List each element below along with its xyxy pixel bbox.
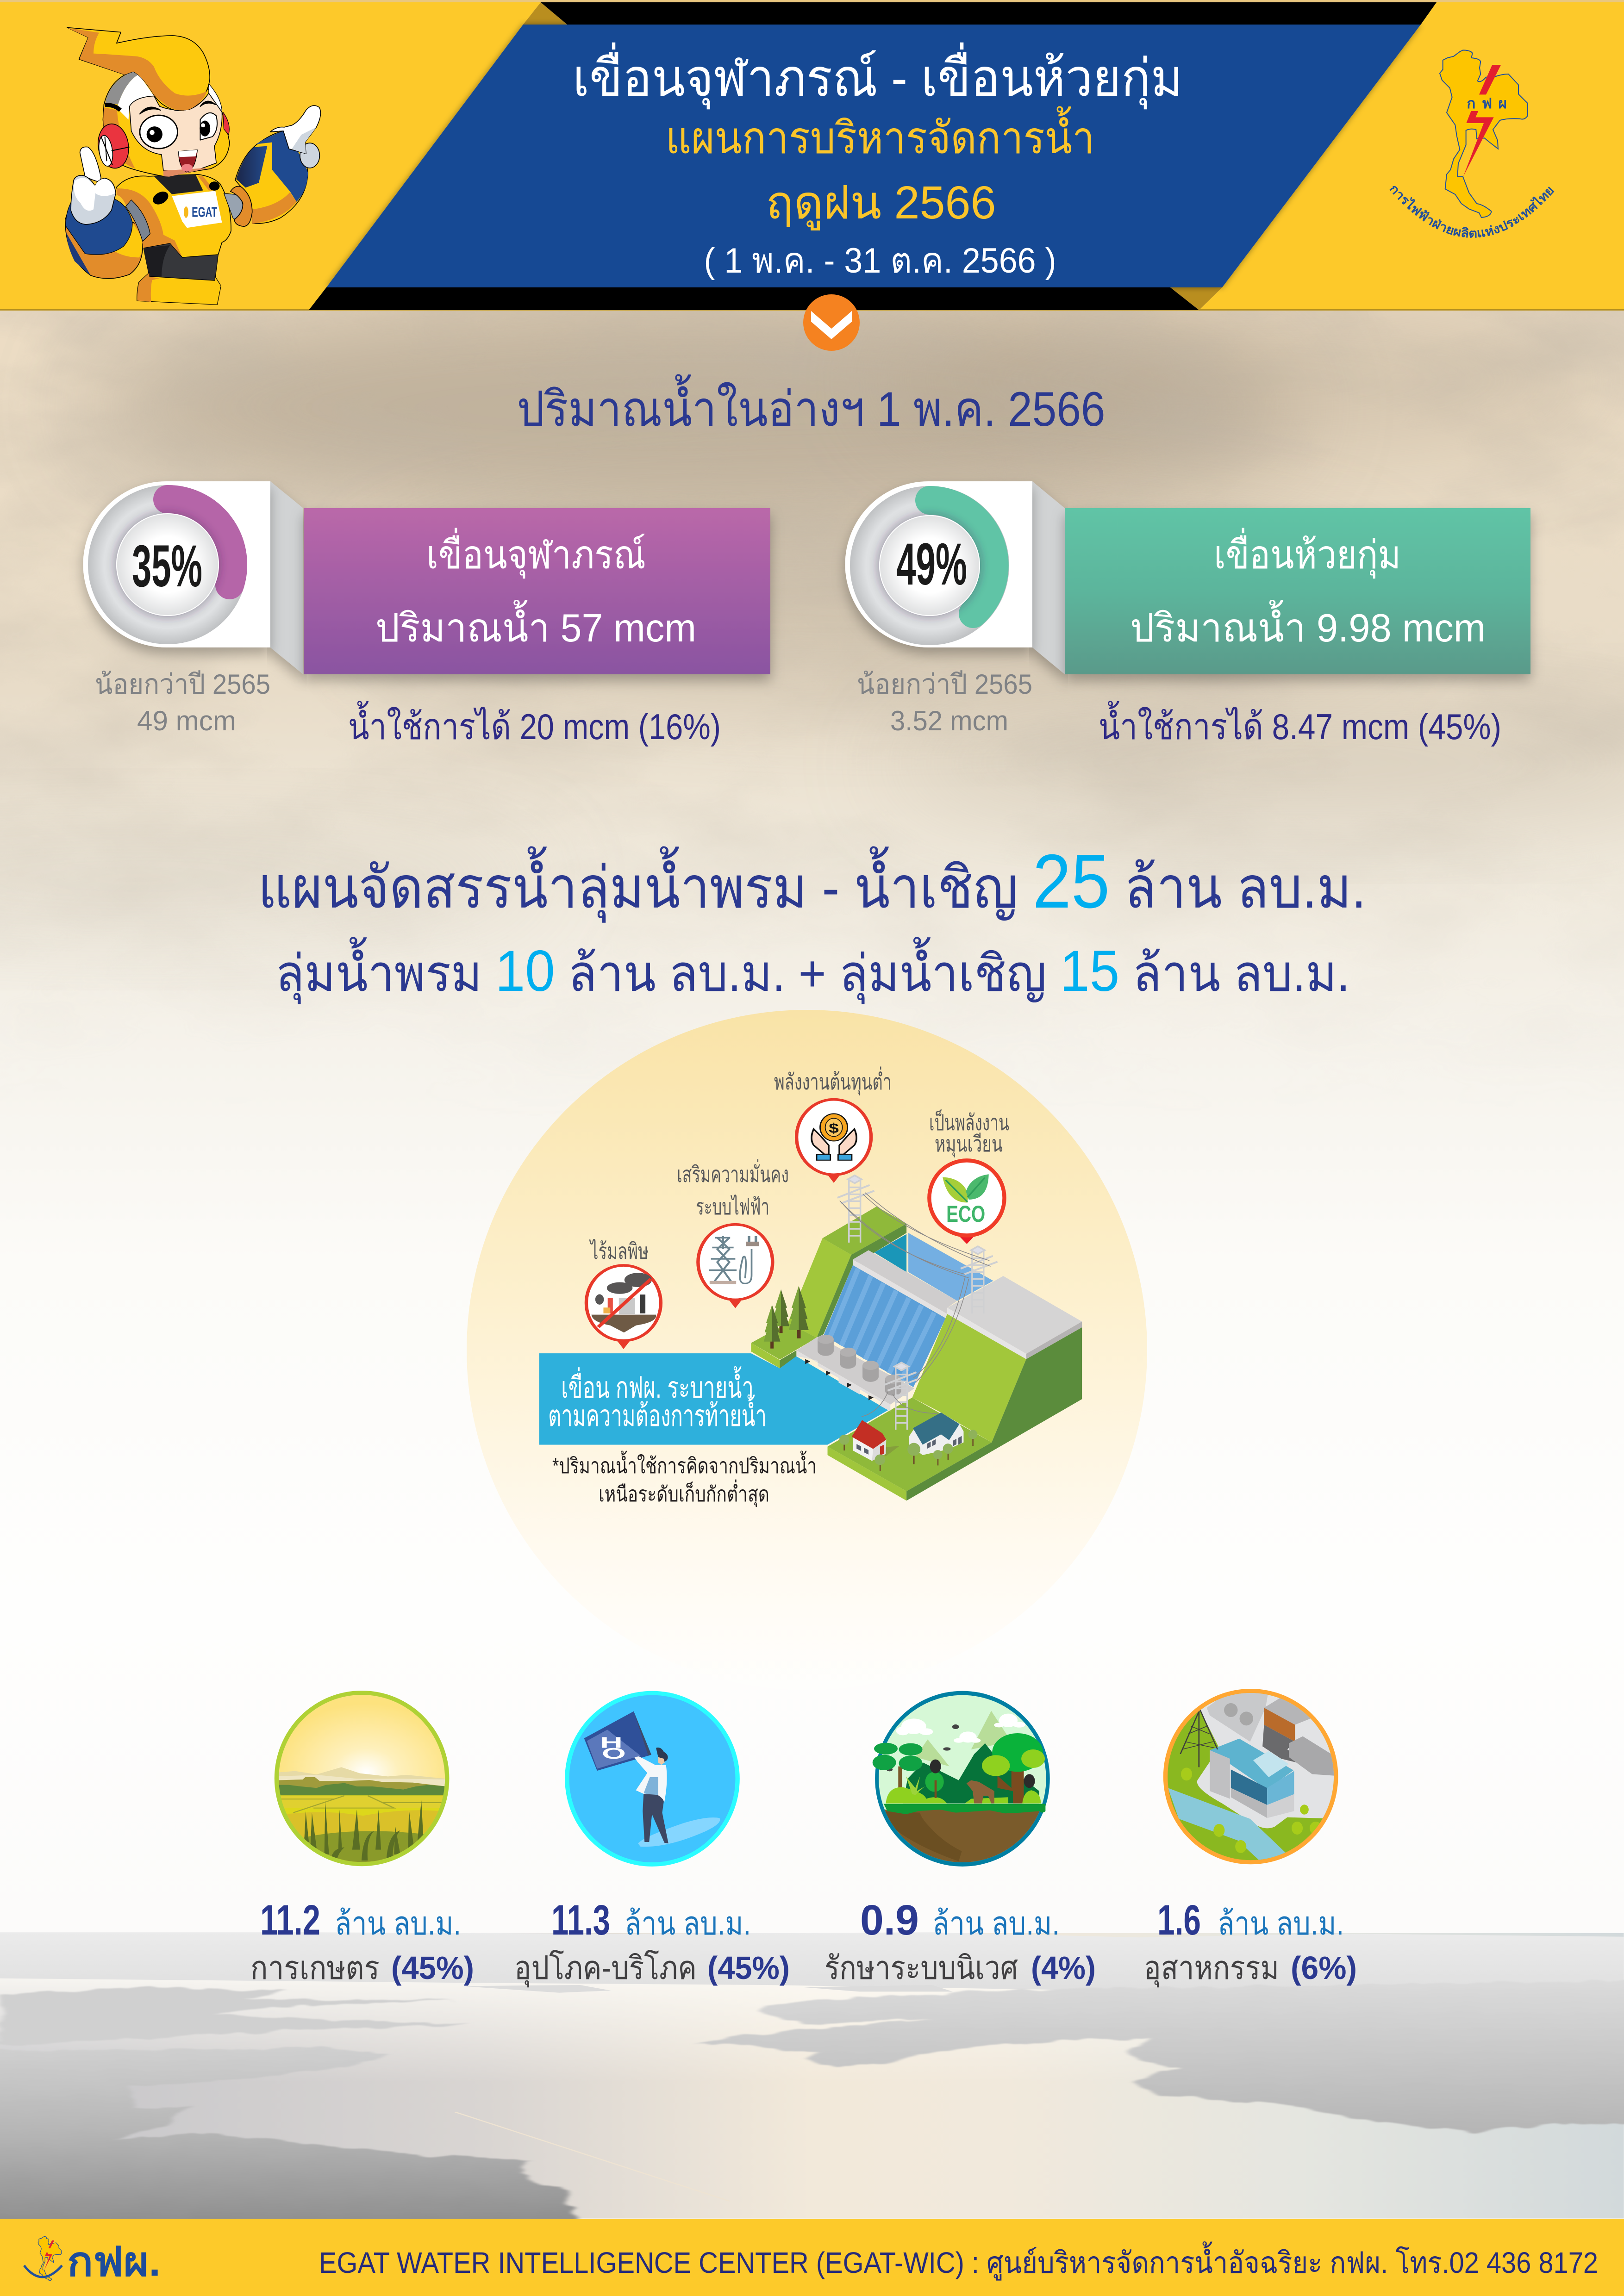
label: renewable energy: หมุนเวียน [935, 1132, 1003, 1157]
lake photo background [0, 1932, 1624, 2224]
sun disc behind dam [467, 1010, 1147, 1690]
label: industry share: (6%) [1291, 1950, 1357, 1986]
EGAT Thailand map logo [1387, 50, 1557, 240]
subtitle: date range: ( 1 พ.ค. - 31 ต.ค. 2566 ) [704, 241, 1056, 280]
pin: low cost energy: $ [829, 1121, 839, 1136]
spillway [824, 1265, 946, 1387]
icon: consumption: H [600, 1734, 623, 1751]
icons: ecosystem and industry [873, 1689, 1338, 1867]
label: ecosystem share: รักษาระบบนิเวศ [824, 1950, 1018, 1986]
EGAT Thailand map logo: กฟผ [1467, 95, 1507, 112]
label: ecosystem share: (4%) [1031, 1950, 1096, 1986]
subheading: basin split: ลุ่มน้ำพรม 10 ล้าน ลบ.ม. + ลุ่มน้ำเชิญ 15 ล้าน ลบ.ม. [275, 937, 1350, 1004]
gauge: 35 percent: 35% [132, 533, 202, 599]
pin: renewable energy: ECO [946, 1201, 985, 1227]
card: purple label [83, 481, 770, 674]
pin: renewable energy [929, 1160, 1005, 1244]
stat: agriculture amount: ล้าน ลบ.ม. [335, 1905, 461, 1941]
icon: industry [1163, 1689, 1338, 1865]
label: grid security: เสริมความมั่นคง [677, 1159, 789, 1187]
icon: chevron down [803, 294, 860, 351]
icons: agriculture and consumption [275, 1691, 740, 1867]
left hill [788, 1207, 906, 1338]
subtitle: plan: แผนการบริหารจัดการน้ำ [666, 106, 1094, 163]
illustration pins [586, 1100, 871, 1349]
stat: consumption amount [551, 1897, 751, 1944]
banner text [548, 1366, 767, 1432]
label: agriculture share [250, 1950, 474, 1986]
usable water: น้ำใช้การได้ 20 mcm (16%) [348, 701, 721, 747]
panel: Huai Kum dam [845, 481, 1530, 747]
dam crest [853, 1250, 957, 1319]
note: less than 2565: น้อยกว่าปี 2565 [95, 669, 270, 700]
label: no pollution: ไร้มลพิษ [589, 1238, 649, 1264]
note: 3.52 mcm: 3.52 mcm [890, 705, 1008, 736]
icon: consumption [565, 1691, 740, 1867]
pin: grid security [698, 1225, 773, 1308]
stat: industry amount: ล้าน ลบ.ม. [1218, 1905, 1344, 1941]
note: 49 mcm: 49 mcm [137, 705, 236, 736]
label: industry share: อุสาหกรรม [1144, 1950, 1279, 1988]
footnote: เหนือระดับเก็บกักต่ำสุด [599, 1479, 769, 1507]
torso [116, 174, 231, 305]
label: agriculture share: (45%) [391, 1950, 474, 1986]
right arm [224, 106, 321, 226]
stat: industry amount: 1.6 [1157, 1897, 1201, 1944]
footer band [0, 2219, 1624, 2296]
icon: consumption: O [602, 1745, 626, 1762]
water banner [539, 1353, 888, 1445]
gauge: 49 percent: 49% [896, 531, 967, 597]
heading: allocation plan: แผนจัดสรรน้ำลุ่มน้ำพรม - น้ำเชิญ 25 ล้าน ลบ.ม. [258, 839, 1366, 924]
icon: ecosystem [873, 1691, 1050, 1867]
label: low cost energy: พลังงานต้นทุนต่ำ [774, 1066, 892, 1095]
mascot [65, 27, 321, 305]
banner text: เขื่อน กฟผ. ระบายน้ำ [561, 1366, 754, 1404]
header band [0, 0, 1624, 311]
stat: industry amount [1157, 1897, 1344, 1944]
gauge: 35 percent [88, 485, 247, 644]
icon: agriculture [275, 1691, 450, 1867]
label: consumption share: (45%) [707, 1950, 790, 1986]
label: renewable energy [929, 1109, 1009, 1157]
stilling basin [796, 1335, 915, 1412]
footer logo [24, 2236, 161, 2284]
banner text: ตามความต้องการท้ายน้ำ [548, 1394, 767, 1432]
stat: ecosystem amount: ล้าน ลบ.ม. [932, 1905, 1060, 1941]
stat: agriculture amount: 11.2 [260, 1897, 320, 1944]
stat: ecosystem amount [860, 1897, 1060, 1944]
card: green label [845, 481, 1530, 674]
stat: consumption amount: 11.3 [551, 1897, 610, 1944]
stat: ecosystem amount: 0.9 [860, 1897, 919, 1944]
small left ground [751, 1323, 817, 1369]
usable water: น้ำใช้การได้ 8.47 mcm (45%) [1099, 701, 1501, 747]
stat: agriculture amount [260, 1897, 461, 1944]
label: water volume: ปริมาณน้ำ 57 mcm [375, 600, 696, 650]
footer logo: กฟผ. [67, 2239, 161, 2284]
small round trees [839, 1430, 977, 1471]
pin: no pollution [586, 1265, 661, 1349]
label: renewable energy: เป็นพลังงาน [929, 1109, 1009, 1135]
EGAT Thailand map logo: การไฟฟ้าฝ่ายผลิตแห่งประเทศไทย [1387, 181, 1557, 240]
stat: consumption amount: ล้าน ลบ.ม. [625, 1905, 751, 1941]
reservoir [874, 1233, 993, 1301]
dam illustration [539, 1160, 1082, 1501]
label: dam name: เขื่อนห้วยกุ่ม [1214, 528, 1401, 579]
torso: EGAT [192, 204, 217, 220]
head [95, 71, 230, 177]
label: grid security [677, 1159, 789, 1220]
panel: Chulabhorn dam [83, 481, 770, 747]
left arm [65, 147, 143, 279]
label: water volume: ปริมาณน้ำ 9.98 mcm [1130, 600, 1486, 650]
label: dam name: เขื่อนจุฬาภรณ์ [426, 528, 646, 579]
footnote: *ปริมาณน้ำใช้การคิดจากปริมาณน้ำ [552, 1450, 817, 1478]
subtitle: season: ฤดูฝน 2566 [766, 177, 996, 230]
label: agriculture share: การเกษตร [250, 1950, 380, 1986]
title: dam names: เขื่อนจุฬาภรณ์ - เขื่อนห้วยกุ่ม [573, 42, 1183, 110]
note: less than 2565: น้อยกว่าปี 2565 [857, 669, 1032, 700]
label: industry share [1144, 1950, 1357, 1988]
blue house [909, 1412, 963, 1455]
pin: low cost energy [797, 1100, 871, 1183]
label: consumption share: อุปโภค-บริโภค [514, 1949, 697, 1988]
red house [852, 1420, 899, 1461]
gauge: 49 percent [850, 486, 1009, 645]
right embankment [828, 1276, 1082, 1501]
heading: reservoir volume: ปริมาณน้ำในอ่างฯ 1 พ.ค. 2566 [517, 374, 1106, 436]
label: grid security: ระบบไฟฟ้า [696, 1194, 769, 1220]
footnote [552, 1450, 817, 1507]
transmission towers and lines [837, 1176, 998, 1430]
pine trees [764, 1286, 809, 1349]
head crest [67, 27, 210, 111]
